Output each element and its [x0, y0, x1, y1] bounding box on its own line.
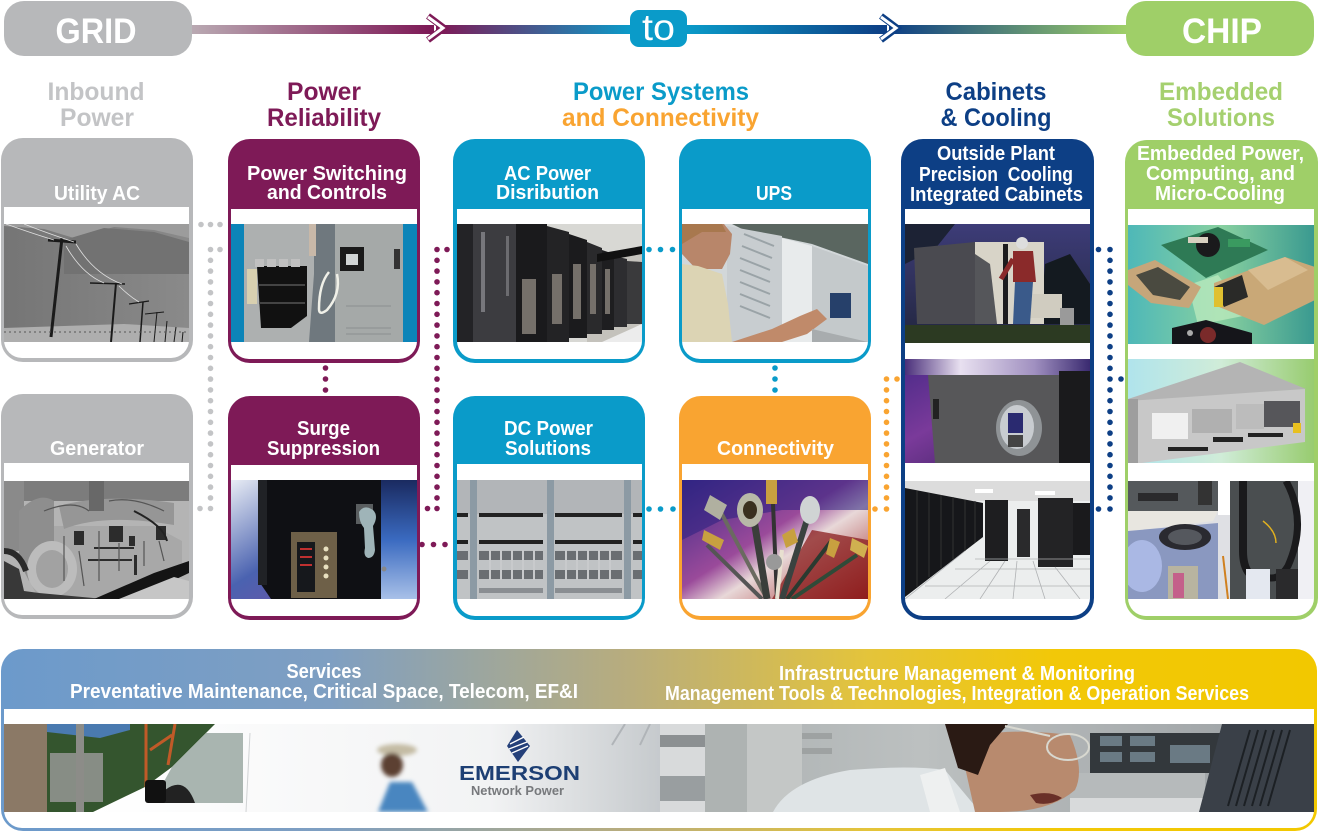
card title: Disribution [496, 182, 599, 204]
card title: Outside Plant [937, 143, 1055, 165]
heading: Power Reliability [267, 78, 381, 132]
card title [247, 163, 407, 204]
card title: Integrated Cabinets [910, 184, 1083, 206]
card title: Computing, and [1146, 163, 1295, 185]
panel: Generator: Generator [50, 438, 144, 460]
text: infrastructure management: Infrastructure Management & Monitoring [779, 663, 1135, 685]
photo: embedded power modules [1128, 225, 1314, 344]
panel: DC Power Solutions [453, 396, 645, 620]
photo: data center aisle [905, 481, 1090, 599]
photo: surge suppressor [231, 480, 417, 599]
connector dots: power systems cyan [646, 247, 778, 512]
CHIP pill [1126, 1, 1314, 56]
panel: Connectivity [679, 396, 871, 620]
panel: Connectivity: Connectivity [717, 438, 835, 460]
panel: services and infrastructure management [1, 649, 1317, 831]
panel: Surge Suppression [228, 396, 420, 620]
text: services: Preventative Maintenance, Critical Space, Telecom, EF&I [70, 681, 578, 703]
card title: AC Power [504, 163, 591, 185]
Emerson logo [459, 730, 580, 798]
heading: Power Systems and Connectivity: Power Systems [573, 78, 749, 106]
heading: Power Reliability: Power [287, 78, 361, 106]
connector dots: power reliability maroon [323, 247, 450, 547]
photo: technician at UPS [682, 224, 868, 342]
panel: AC Power Disribution [453, 139, 645, 363]
GRID pill [4, 1, 192, 56]
heading: Power Reliability: Reliability [267, 104, 381, 132]
panel: Power Switching and Controls [228, 139, 420, 363]
heading: Power Systems and Connectivity: and Connectivity [562, 104, 759, 132]
card title: Embedded Power, [1137, 143, 1304, 165]
panel: Utility AC [1, 138, 193, 362]
photo: utility poles [4, 224, 189, 342]
Emerson logo: EMERSON [459, 763, 580, 785]
photo: rack power unit [1128, 359, 1314, 463]
card title: Solutions [505, 438, 591, 460]
photo: DC rectifier shelves [457, 480, 642, 599]
card title: Power Switching [247, 163, 407, 185]
heading: Inbound Power [48, 78, 144, 132]
card title: Micro-Cooling [1155, 183, 1285, 205]
card title [910, 143, 1083, 206]
arrow bar [190, 25, 1129, 34]
to pill: to [642, 7, 675, 48]
card title [267, 418, 380, 460]
panel: Utility AC: Utility AC [54, 183, 140, 205]
panel: UPS [679, 139, 871, 363]
Emerson logo: Network Power [471, 783, 564, 798]
technician blur [377, 744, 428, 812]
heading: Cabinets and Cooling: & Cooling [940, 104, 1052, 132]
text: services [70, 661, 578, 703]
panel: UPS: UPS [756, 183, 792, 205]
card title [504, 418, 593, 460]
photo: switch cabinet [231, 224, 417, 342]
card title [496, 163, 599, 204]
connector dots: connectivity orange [872, 376, 900, 512]
card title: Precision Cooling [919, 164, 1073, 186]
text: infrastructure management [665, 663, 1249, 705]
card title: DC Power [504, 418, 593, 440]
arrow chevron 1 [428, 16, 444, 40]
card title: and Controls [267, 182, 387, 204]
connector dots: cabinets navy [1096, 247, 1124, 512]
heading: Cabinets and Cooling [940, 78, 1052, 132]
heading: Inbound Power: Power [60, 104, 134, 132]
to pill [630, 7, 687, 48]
photo: generator engine [4, 481, 189, 599]
panel: Cabinets and Cooling [901, 139, 1094, 620]
heading: Embedded Solutions [1159, 78, 1283, 132]
photo: AC racks [457, 224, 642, 342]
panel: Generator [1, 394, 193, 619]
card title: Surge [297, 418, 350, 440]
photo: coax connectors [682, 480, 868, 599]
GRID pill: GRID [56, 12, 136, 51]
arrow chevron 2 [881, 16, 897, 40]
photo: outside plant unit [905, 224, 1090, 343]
photo: service van and technician [4, 724, 660, 812]
photo: precision cooling unit [905, 359, 1090, 463]
heading: Power Systems and Connectivity [562, 78, 759, 132]
text: infrastructure management: Management Tools & Technologies, Integration & Operation Services [665, 683, 1249, 705]
heading: Embedded Solutions: Solutions [1167, 104, 1275, 132]
panel: Embedded Solutions [1122, 140, 1318, 620]
top banner: grid to chip arrow [4, 1, 1314, 56]
connector dots: inbound gray [197, 222, 223, 511]
CHIP pill: CHIP [1182, 12, 1262, 51]
text: services: Services [286, 661, 362, 683]
heading: Inbound Power: Inbound [48, 78, 144, 106]
heading: Cabinets and Cooling: Cabinets [946, 78, 1046, 106]
card title [1137, 143, 1304, 205]
photo: computer interior [1128, 481, 1314, 599]
heading: Embedded Solutions: Embedded [1159, 78, 1283, 106]
photo: engineer at monitor [660, 724, 1314, 812]
card title: Suppression [267, 438, 380, 460]
